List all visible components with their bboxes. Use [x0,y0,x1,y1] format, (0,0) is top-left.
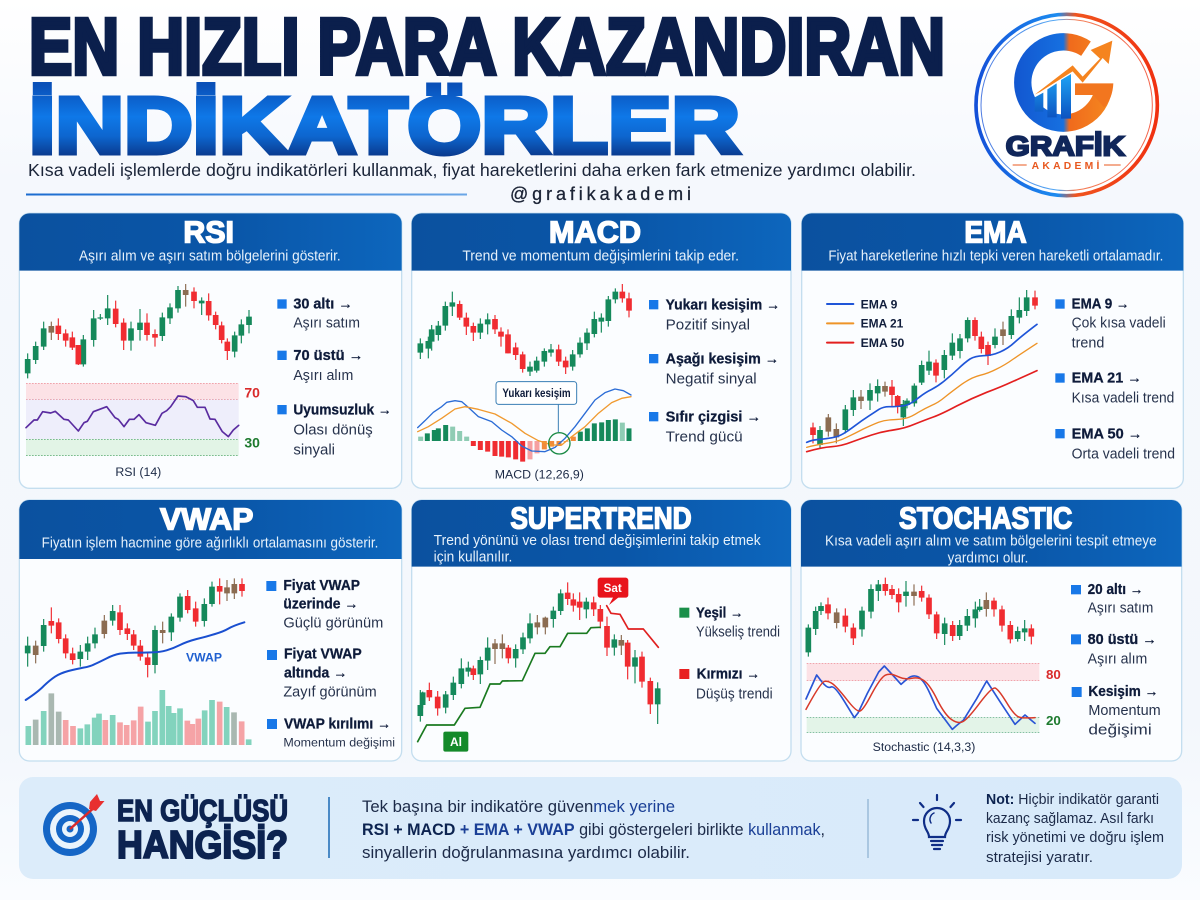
candlestick chart [808,578,1031,657]
legend: MACD: Trend gücü [666,430,743,446]
callout: Yukarı kesişim [496,382,577,454]
RSI oscillator [26,383,260,479]
logo: Grafik Akademi [974,12,1160,198]
logo ring [976,14,1157,196]
legend: MACD [649,297,780,446]
legend: RSI: 30 altı → [293,296,353,312]
legend: MACD: Negatif sinyal [666,371,757,387]
body text: RSI + MACD + EMA + VWAP gibi göstergeleri birlikte kullanmak, [362,821,825,839]
legend: VWAP: Fiyat VWAP [283,578,360,594]
legend: RSI: Olası dönüş [293,422,373,438]
legend: VWAP: Güçlü görünüm [283,615,383,631]
handle: @grafikakademi [510,184,691,204]
header: STOCHASTIC [801,500,1182,567]
header: EMA [802,213,1183,271]
header: SUPERTREND: Trend yönünü ve olası trend değişimlerini takip etmek [434,533,761,549]
header: STOCHASTIC: Kısa vadeli aşırı alım ve satım bölgelerini tespit etmeye [825,534,1157,550]
legend: VWAP: Momentum değişimi [283,736,395,750]
legend: STOCHASTIC: Kesişim → [1088,684,1158,700]
note text: kazanç sağlamaz. Asıl farkı [986,811,1154,827]
body text [362,798,825,862]
RSI oscillator: 30 [244,435,260,451]
subtitle: Kısa vadeli işlemlerde doğru indikatörleri kullanmak, fiyat hareketlerini daha erken fark etmenize yardımcı olabilir. [28,160,916,180]
RSI oscillator: 70 [244,385,260,401]
legend: VWAP: altında → [284,666,347,682]
header: EMA: EMA [964,215,1027,249]
panel: VWAP [18,499,402,762]
badge: Al: Al [450,735,462,749]
legend: EMA: EMA 9 → [1072,296,1129,312]
logo wordmark: GRAFİK [1006,130,1125,161]
legend: EMA: Kısa vadeli trend [1072,391,1174,407]
title line 2: İNDİKATÖRLER [29,81,740,170]
body text: sinyallerin doğrulanmasına yardımcı olabilir. [362,844,690,862]
panel: RSI [18,212,402,489]
header: VWAP: Fiyatın işlem hacmine göre ağırlıklı ortalamasını gösterir. [42,536,378,552]
panel: footer [19,777,1182,879]
legend: RSI: Uyumsuzluk → [293,402,392,418]
EMA key: EMA 50 [861,336,905,350]
badge: Sat [598,578,628,605]
legend: RSI: sinyali [293,442,335,458]
candlestick chart [420,284,629,376]
legend: SUPERTREND: Yeşil → [696,605,743,621]
legend: EMA: Orta vadeli trend [1072,446,1175,462]
legend: RSI: Aşırı alım [293,368,353,384]
legend: EMA: Çok kısa vadeli [1072,316,1166,332]
accent rule [26,194,467,196]
note text [986,792,1164,866]
legend: STOCHASTIC: Momentum [1088,703,1161,719]
heading: EN GÜÇLÜSÜ HANGİSİ?: EN GÜÇLÜSÜ [117,793,288,828]
EMA key [827,297,905,350]
header: title, subtitle and handle [26,2,945,204]
legend: EMA: EMA 50 → [1072,426,1142,442]
legend: SUPERTREND: Kırmızı → [697,666,760,682]
panel: MACD [411,212,792,489]
legend: EMA: trend [1072,335,1104,351]
legend: SUPERTREND: Düşüş trendi [696,686,773,702]
legend: STOCHASTIC: değişimi [1088,722,1152,738]
legend: STOCHASTIC: Aşırı satım [1088,601,1153,617]
header: VWAP [19,500,402,559]
header: RSI: Aşırı alım ve aşırı satım bölgelerini gösterir. [79,249,341,265]
legend: MACD: Yukarı kesişim → [666,297,780,313]
EMA key: EMA 9 [861,297,898,311]
legend: MACD: Sıfır çizgisi → [666,409,761,425]
candlestick chart [28,284,249,378]
header: RSI: RSI [183,215,234,249]
stochastic oscillator: 80 [1046,667,1061,682]
EMA key: EMA 21 [861,317,904,331]
MACD histogram and signal lines: MACD (12,26,9) [495,468,584,482]
legend: VWAP: VWAP kırılımı → [284,716,391,732]
logo tagline [1013,159,1121,172]
note text: risk yönetimi ve doğru işlem [986,830,1164,846]
logo G mark with bars and arrow [1023,41,1113,123]
legend: RSI: 70 üstü → [293,348,363,364]
legend: EMA [1055,296,1175,462]
header: SUPERTREND: SUPERTREND [510,501,692,535]
panel: STOCHASTIC [800,499,1182,762]
candlestick chart with VWAP line: VWAP [186,651,222,665]
stochastic oscillator: 20 [1046,713,1061,728]
candlestick chart with EMA lines [807,290,1037,452]
legend: EMA: EMA 21 → [1072,371,1142,387]
note text: stratejisi yaratır. [986,850,1093,866]
body text: Tek başına bir indikatöre güvenmek yerine [362,798,675,816]
RSI oscillator: RSI (14) [115,465,161,479]
legend: RSI [277,296,392,458]
legend: VWAP: Fiyat VWAP [284,646,362,662]
candlestick chart with supertrend line [418,582,658,742]
callout: Yukarı kesişim: Yukarı kesişim [502,387,571,400]
legend: VWAP: üzerinde → [283,596,358,612]
legend: RSI: Aşırı satım [293,316,360,332]
icon: target with arrow [43,794,104,856]
icon: light bulb [913,795,961,849]
header: MACD: MACD [549,215,641,249]
legend: SUPERTREND: Yükseliş trendi [696,625,780,641]
stochastic oscillator: Stochastic (14,3,3) [873,740,975,754]
candlestick chart with VWAP line [26,578,244,700]
panel: SUPERTREND [411,499,792,762]
header: SUPERTREND: için kullanılır. [434,550,512,566]
header: RSI [19,213,402,271]
header: STOCHASTIC: yardımcı olur. [948,551,1028,567]
volume bars [28,690,249,745]
legend: SUPERTREND [679,605,780,702]
legend: STOCHASTIC: Aşırı alım [1088,652,1147,668]
heading: EN GÜÇLÜSÜ HANGİSİ?: HANGİSİ? [117,824,288,867]
heading: EN GÜÇLÜSÜ HANGİSİ? [117,793,288,867]
badge: Sat: Sat [604,582,622,595]
legend: MACD: Pozitif sinyal [666,317,750,333]
header: STOCHASTIC: STOCHASTIC [899,501,1072,535]
legend: STOCHASTIC [1071,582,1161,738]
header: SUPERTREND [412,500,791,567]
header: EMA: Fiyat hareketlerine hızlı tepki veren hareketli ortalamadır. [828,249,1163,265]
legend: VWAP [266,578,395,750]
legend: STOCHASTIC: 20 altı → [1088,582,1143,598]
legend: VWAP: Zayıf görünüm [283,685,377,701]
note text: Not: Hiçbir indikatör garanti [986,792,1159,808]
header: VWAP: VWAP [160,502,253,536]
MACD histogram and signal lines [418,389,631,482]
panel: EMA [801,212,1184,489]
badge: Al [443,732,468,752]
legend: STOCHASTIC: 80 üstü → [1088,632,1157,648]
header: MACD: Trend ve momentum değişimlerini takip eder. [462,249,739,265]
logo tagline: AKADEMİ [1032,159,1099,172]
legend: MACD: Aşağı kesişim → [666,351,779,367]
stochastic oscillator [806,663,1061,754]
header: MACD [412,213,791,271]
